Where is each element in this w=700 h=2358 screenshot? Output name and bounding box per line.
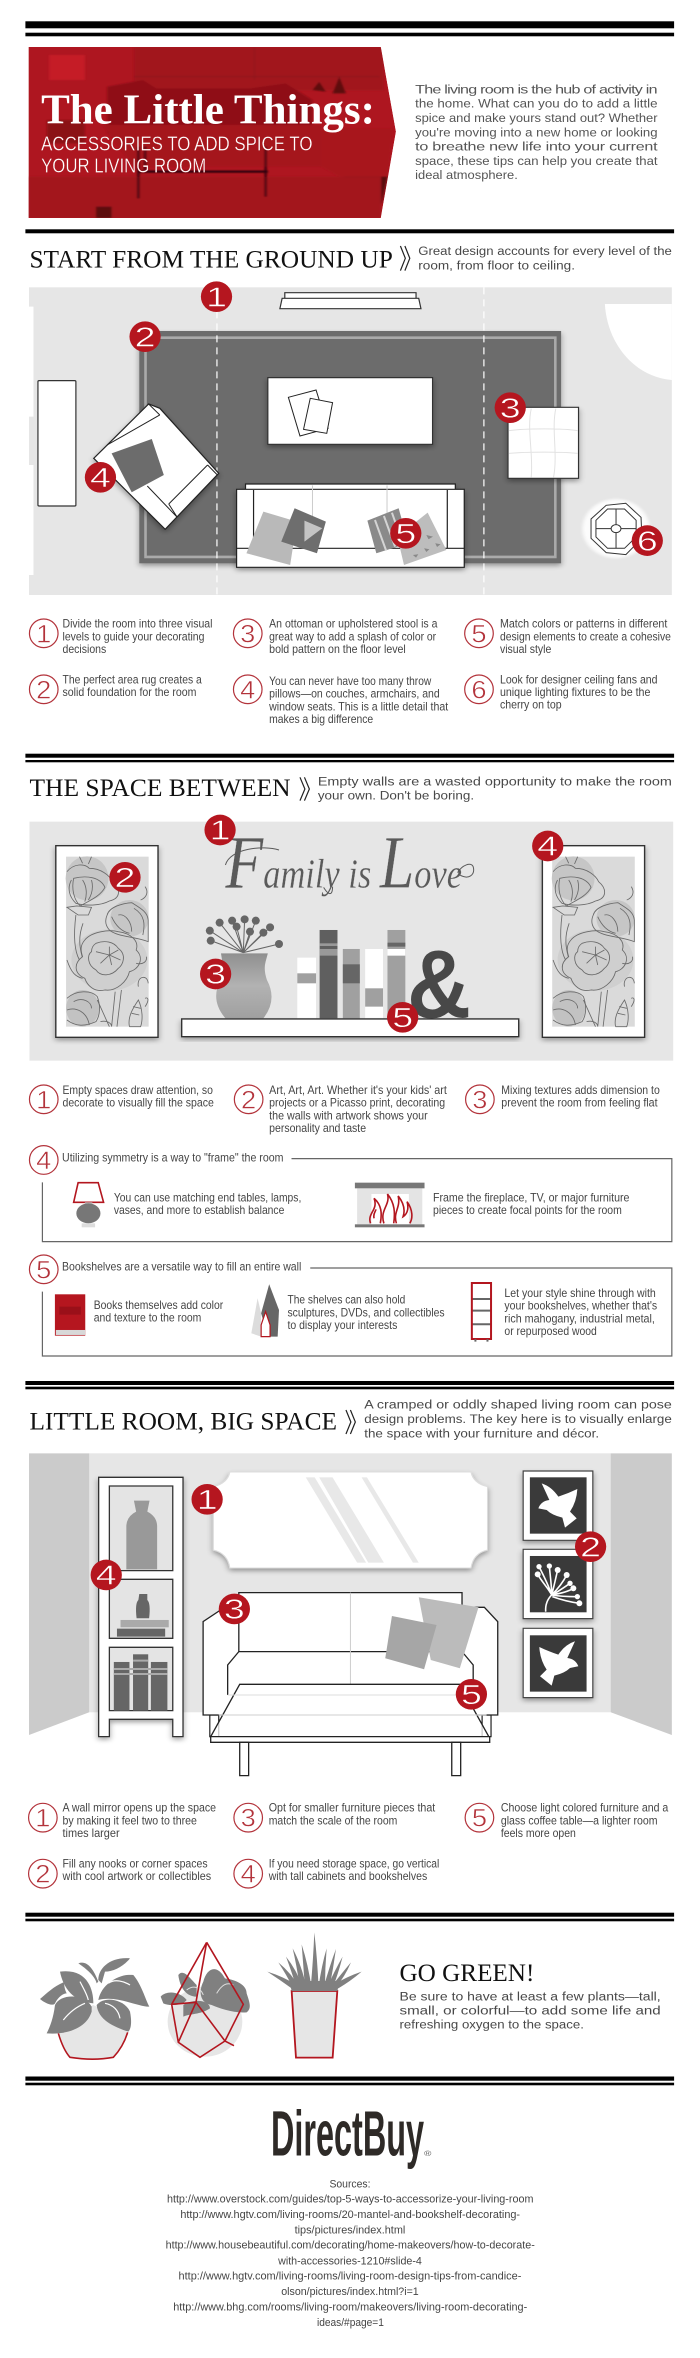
section heading: start from the ground up: room, from floor to ceiling. xyxy=(418,259,575,273)
tip 1: by making it feel two to three xyxy=(62,1814,197,1827)
tip 5: 5 xyxy=(472,1805,487,1833)
hero subtitle: YOUR LIVING ROOM xyxy=(41,156,206,178)
marker 2: 2 xyxy=(135,322,156,353)
section heading: start from the ground up: START FROM THE GROUND UP xyxy=(29,246,393,273)
tip 3: 3 xyxy=(472,1086,487,1114)
tip 2 xyxy=(29,1858,211,1889)
hero title: The Little Things: xyxy=(41,86,375,133)
go green text block: GO GREEN! xyxy=(400,1960,534,1987)
hero photo background xyxy=(29,47,396,218)
marker 6: 6 xyxy=(637,526,658,557)
icon: lamp xyxy=(74,1183,104,1227)
marker 1: 1 xyxy=(206,282,227,313)
tip 4: pillows—on couches, armchairs, and xyxy=(269,688,440,700)
hero subtitle: ACCESSORIES TO ADD SPICE TO xyxy=(41,134,312,156)
marker 2 xyxy=(109,862,141,894)
tip 1 xyxy=(29,1802,216,1840)
tip 3: 3 xyxy=(241,1805,256,1833)
tip 2: 2 xyxy=(36,676,51,704)
ampersand: & xyxy=(407,931,471,1038)
section heading: the space between: THE SPACE BETWEEN xyxy=(29,775,291,802)
tip 5: bookshelves box: or repurposed wood xyxy=(504,1325,597,1338)
tip 2: the walls with artwork shows your xyxy=(269,1109,428,1122)
marker 5 xyxy=(456,1679,487,1711)
tip 1: times larger xyxy=(62,1827,120,1840)
marker 3 xyxy=(495,392,526,424)
wall quote: Family is Love xyxy=(225,821,462,904)
DirectBuy logo xyxy=(271,2098,432,2170)
ottoman xyxy=(508,407,579,478)
plant 2: hanging terrarium xyxy=(161,1942,250,2057)
hero subtitle xyxy=(41,134,312,178)
intro text: The living room is the hub of activity in xyxy=(415,83,658,97)
marker 4: 4 xyxy=(537,831,558,862)
tip 5: bookshelves box: Bookshelves are a versatile way to fill an entire wall xyxy=(62,1260,301,1273)
icon: sculpture xyxy=(251,1284,279,1337)
tip 5: bookshelves box: 5 xyxy=(36,1256,51,1284)
tip 5 xyxy=(465,618,671,656)
marker 5 xyxy=(390,518,421,550)
plant 3: spiky succulent xyxy=(267,1932,362,2058)
side table xyxy=(38,381,76,506)
sources: Sources: xyxy=(329,2177,371,2190)
intro text: the home. What can you do to add a little xyxy=(415,98,658,111)
fireplace xyxy=(280,293,421,309)
shelf xyxy=(182,1019,519,1037)
tip 5: bookshelves box: to display your interests xyxy=(287,1319,397,1332)
section heading: the space between: your own. Don't be boring. xyxy=(318,789,474,803)
section heading: the space between xyxy=(29,775,672,803)
tip 3: 3 xyxy=(240,620,255,648)
tip 3: bold pattern on the floor level xyxy=(269,643,406,656)
tip 2: Art, Art, Art. Whether it's your kids' art xyxy=(269,1084,447,1097)
tip 2 xyxy=(234,1084,447,1135)
tips: section one xyxy=(29,618,671,726)
sources: http://www.bhg.com/rooms/living-room/makeovers/living-room-decorating- xyxy=(173,2300,527,2313)
marker 1 xyxy=(204,815,236,846)
tip 2: 2 xyxy=(35,1861,50,1889)
tips: section three xyxy=(29,1802,669,1889)
panel: hero banner xyxy=(29,47,396,218)
tip 2: with cool artwork or collectibles xyxy=(62,1870,211,1883)
icon: fireplace xyxy=(355,1183,425,1227)
tip 3: great way to add a splash of color or xyxy=(269,630,436,643)
tip 4: symmetry box: vases, and more to establish balance xyxy=(114,1204,285,1217)
tip 4 xyxy=(234,1858,439,1889)
marker 5: 5 xyxy=(392,1002,413,1034)
marker 3: 3 xyxy=(224,1594,245,1625)
framed art: bird xyxy=(523,1471,593,1540)
tall bookcase xyxy=(99,1477,183,1737)
tip 4: with tall cabinets and bookshelves xyxy=(268,1870,427,1883)
intro text: ideal atmosphere. xyxy=(415,169,518,182)
marker 5 xyxy=(387,1002,418,1034)
intro text xyxy=(415,83,658,182)
tip 5: bookshelves box: The shelves can also hold xyxy=(287,1293,405,1306)
tip 3 xyxy=(233,618,438,656)
left floral art frame xyxy=(56,846,158,1037)
section heading: little room, big space xyxy=(29,1399,672,1441)
tip 4: You can never have too many throw xyxy=(269,675,431,688)
marker 1 xyxy=(192,1484,223,1516)
tip 4: symmetry box xyxy=(29,1146,672,1242)
right floral art frame xyxy=(542,846,645,1037)
sources: http://www.overstock.com/guides/top-5-ways-to-accessorize-your-living-room xyxy=(167,2193,533,2205)
tip 5: 5 xyxy=(471,620,487,648)
section heading: little room, big space: the space with your furniture and décor. xyxy=(364,1427,599,1441)
area rug xyxy=(139,331,561,563)
tip 1: levels to guide your decorating xyxy=(62,630,204,643)
go green text block xyxy=(400,1960,661,2032)
tip 2: personality and taste xyxy=(269,1122,366,1135)
tip 4: makes a big difference xyxy=(269,713,373,726)
panel: go green xyxy=(40,1932,661,2059)
tip 1: 1 xyxy=(35,1805,50,1833)
DirectBuy logo: ® xyxy=(424,2149,432,2158)
tip 1: A wall mirror opens up the space xyxy=(62,1802,216,1814)
tip 2: projects or a Picasso print, decorating xyxy=(269,1097,445,1109)
panel: wall decor xyxy=(29,815,673,1061)
infographic canvas: DirectBuy xyxy=(271,2098,424,2170)
marker 3 xyxy=(200,959,231,990)
sources: ideas/#page=1 xyxy=(317,2316,384,2329)
marker 2: 2 xyxy=(115,862,135,894)
tip 6 xyxy=(465,674,658,711)
marker 2 xyxy=(129,321,161,353)
tip 5 xyxy=(465,1802,669,1840)
tip 4 xyxy=(233,675,448,726)
marker 1 xyxy=(201,281,232,313)
tip 4: window seats. This is a little detail that xyxy=(268,700,448,713)
tip 4: If you need storage space, go vertical xyxy=(269,1858,439,1870)
marker 6 xyxy=(632,525,663,557)
section heading: little room, big space: LITTLE ROOM, BIG SPACE xyxy=(29,1409,337,1436)
plant 1 xyxy=(40,1958,149,2059)
tip 4: 4 xyxy=(240,676,255,704)
marker 3 xyxy=(219,1594,250,1625)
tip 4: symmetry box: You can use matching end tables, lamps, xyxy=(114,1191,301,1204)
marker 5: 5 xyxy=(395,518,416,550)
icon: red book xyxy=(55,1294,85,1336)
level divider lines xyxy=(217,287,484,595)
sources xyxy=(166,2177,535,2329)
sources: olson/pictures/index.html?i=1 xyxy=(281,2285,419,2298)
tip 3 xyxy=(466,1084,660,1114)
marker 3: 3 xyxy=(500,393,521,424)
glass coffee table xyxy=(211,1684,490,1776)
marker 2 xyxy=(575,1531,606,1563)
back wall and side walls xyxy=(29,1453,672,1735)
intro text: to breathe new life into your current xyxy=(415,140,658,154)
marker 4 xyxy=(85,462,116,494)
tip 6: 6 xyxy=(471,676,487,704)
books xyxy=(297,930,405,1018)
sources: http://www.hgtv.com/living-rooms/20-mantel-and-bookshelf-decorating- xyxy=(180,2208,520,2221)
tip 5: bookshelves box: Books themselves add color xyxy=(94,1299,224,1312)
door swing xyxy=(605,304,672,380)
tip 1 xyxy=(29,618,212,656)
go green text block: refreshing oxygen to the space. xyxy=(400,2018,584,2032)
marker 4: 4 xyxy=(96,1560,117,1591)
tip 1 xyxy=(29,1084,214,1114)
tip 3: Opt for smaller furniture pieces that xyxy=(269,1802,435,1814)
sofa xyxy=(203,1593,498,1737)
coffee table xyxy=(268,378,433,444)
go green text block: Be sure to have at least a few plants—tall, xyxy=(400,1990,661,2004)
tip 1: 1 xyxy=(36,1086,51,1114)
wall mirror xyxy=(213,1472,487,1568)
sources: http://www.hgtv.com/living-rooms/living-room-design-tips-from-candice- xyxy=(179,2269,521,2282)
tip 2: Fill any nooks or corner spaces xyxy=(62,1858,208,1870)
tip 2: 2 xyxy=(241,1086,256,1114)
tip 3: An ottoman or upholstered stool is a xyxy=(269,618,438,630)
go green text block: small, or colorful—to add some life and xyxy=(400,2004,661,2018)
tip 2: solid foundation for the room xyxy=(62,686,196,699)
tip 1: Divide the room into three visual xyxy=(62,618,212,630)
tip 4: symmetry box: Utilizing symmetry is a way to "frame" the room xyxy=(62,1151,283,1164)
marker 4 xyxy=(532,831,563,862)
tip 4: 4 xyxy=(241,1861,256,1889)
tip 1: 1 xyxy=(36,620,51,648)
marker 4: 4 xyxy=(90,462,111,494)
marker 1: 1 xyxy=(197,1484,218,1516)
tips: section two xyxy=(29,1084,672,1356)
ceiling fan xyxy=(583,499,650,558)
panel: floor plan xyxy=(29,281,672,595)
marker 5: 5 xyxy=(461,1679,482,1711)
sources: tips/pictures/index.html xyxy=(295,2223,405,2236)
tip 5: bookshelves box: and texture to the room xyxy=(94,1311,201,1324)
marker 2: 2 xyxy=(580,1532,601,1563)
sofa xyxy=(237,484,464,567)
marker 4 xyxy=(91,1560,122,1591)
sources: with-accessories-1210#slide-4 xyxy=(277,2254,422,2267)
armchair xyxy=(94,404,219,529)
framed art: bird facing right xyxy=(523,1628,593,1698)
tip 1: decorate to visually fill the space xyxy=(62,1097,214,1109)
marker 3: 3 xyxy=(205,959,226,990)
tip 6: cherry on top xyxy=(500,699,562,711)
vase with dried flowers xyxy=(206,915,283,1018)
tip 3 xyxy=(234,1802,435,1833)
tip 4: symmetry box: 4 xyxy=(36,1147,51,1175)
marker 1: 1 xyxy=(210,815,231,846)
tip 1: Empty spaces draw attention, so xyxy=(62,1084,213,1097)
tip 5: feels more open xyxy=(501,1827,576,1840)
tip 2: The perfect area rug creates a xyxy=(62,674,202,686)
tip 2 xyxy=(29,674,202,704)
tip 5: bookshelves box: sculptures, DVDs, and collectibles xyxy=(287,1306,445,1319)
tip 5: bookshelves box xyxy=(29,1255,672,1356)
tip 5: visual style xyxy=(500,643,552,656)
tip 1: decisions xyxy=(62,643,106,656)
framed art: dandelion xyxy=(523,1549,593,1619)
panel: small room elevation xyxy=(29,1453,672,1776)
sources: http://www.housebeautiful.com/decorating/home-makeovers/how-to-decorate- xyxy=(166,2238,535,2251)
icon: bookcase xyxy=(472,1283,491,1342)
tip 3: match the scale of the room xyxy=(269,1814,397,1827)
